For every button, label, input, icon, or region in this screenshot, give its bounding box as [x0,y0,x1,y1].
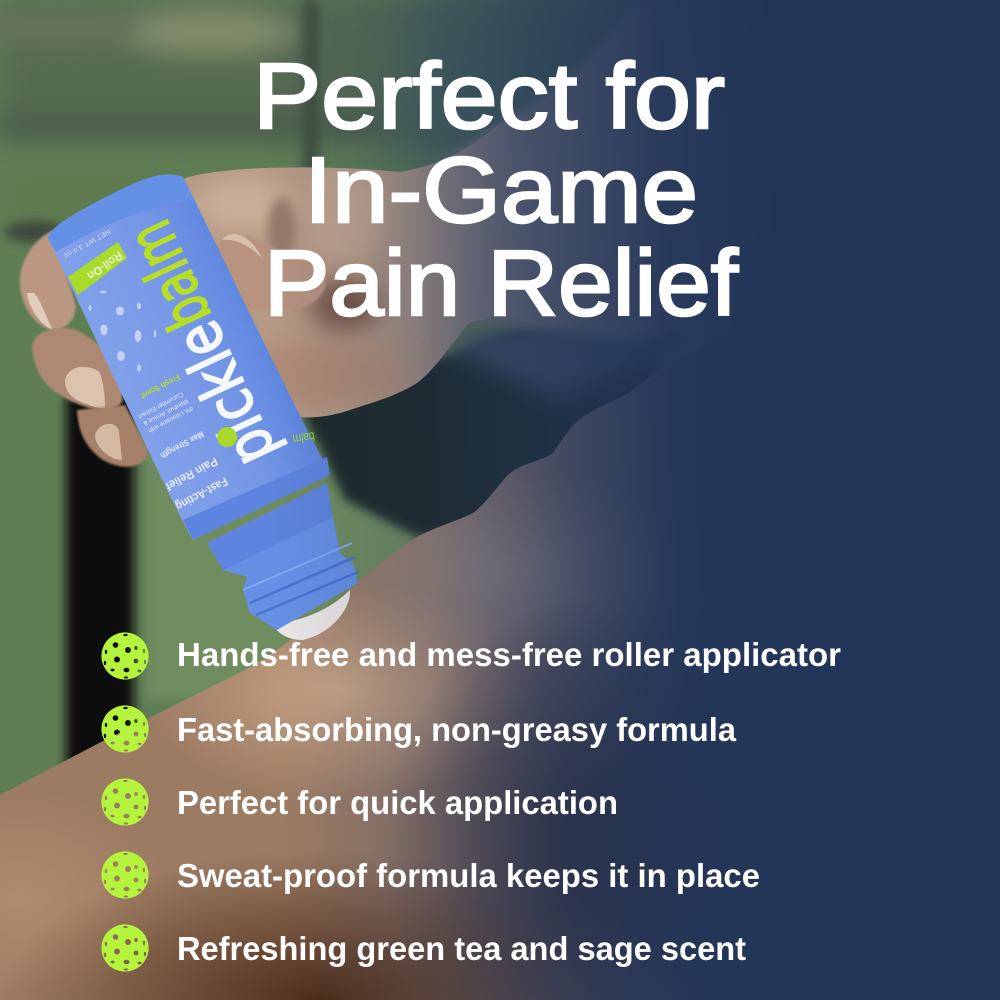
net weight text: NET WT 3.4 oz [62,227,111,259]
product copy: Max Strength [159,429,206,461]
brand word pickle: pickle [161,311,291,478]
benefit 2 [101,705,737,753]
roll-on green tag [68,242,127,295]
foreground forearm [0,376,680,1000]
back panel small green logo: balm [292,429,316,447]
title: Pain Relief [264,231,738,335]
brand word balm: balm [113,210,226,341]
fresh scent label: Fresh Scent [139,372,182,401]
benefit 4: Sweat-proof formula keeps it in place [177,857,760,894]
icon: pickleball [101,924,149,972]
product copy: Pain Relief [162,454,220,494]
thumb [218,235,326,310]
bottle cap [48,174,194,252]
icon: pickleball [101,632,149,680]
product copy: Fast-Acting [173,474,230,513]
roller ball [272,590,350,640]
bottle neck and collar [207,483,358,630]
benefit list [101,632,841,972]
title [253,44,738,335]
icon: pickleball [101,705,149,753]
bottle logo ball [217,427,237,447]
icon: pickleball [101,851,149,899]
title: In-Game [304,138,698,242]
benefit 1: Hands-free and mess-free roller applicator [177,636,841,673]
benefit 3 [101,778,618,826]
product copy: 4% Lidocaine with [147,404,194,434]
benefit 2: Fast-absorbing, non-greasy formula [177,711,737,748]
pickleballm roll-on bottle [48,174,358,640]
product copy: Cucumber Extract [137,390,184,420]
product copy [137,390,230,513]
benefit 3: Perfect for quick application [177,784,618,821]
ring finger [77,405,148,467]
benefit 4 [101,851,760,899]
middle finger [32,328,122,410]
index finger [20,230,76,330]
icon: pickleball [101,778,149,826]
white dots on bottle [89,291,156,372]
lower band [183,457,330,540]
hand holding the bottle [18,122,506,468]
holding forearm in background [400,0,1000,340]
roll-on green tag: Roll-On [85,249,125,283]
product copy: Menthol, Arnica & [141,397,189,427]
benefit 5 [101,924,746,972]
bottle body [48,174,330,540]
benefit 5: Refreshing green tea and sage scent [177,930,746,967]
title: Perfect for [253,44,725,148]
